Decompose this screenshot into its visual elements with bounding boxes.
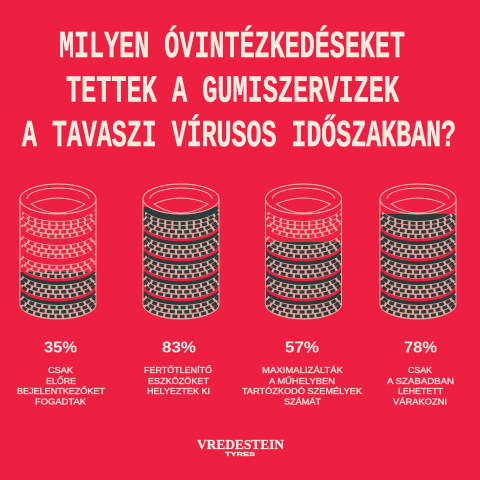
statistic: 83%: ESZKÖZÖKET [148, 377, 209, 386]
statistic: 57%: 57% [285, 340, 319, 356]
statistic: 78% [387, 340, 454, 406]
chart: tyre stack 35% [20, 184, 96, 319]
statistic: 35%: CSAK [48, 366, 74, 375]
statistic: 83%: HELYEZTEK KI [147, 387, 210, 396]
statistic: 57%: TARTÓZKODÓ SZEMÉLYEK [242, 387, 363, 396]
statistic: 35%: ELŐRE [46, 377, 76, 386]
chart: tyre stack 57% [266, 184, 342, 319]
chart: tyre stack 78% [380, 184, 456, 319]
statistic: 78%: 78% [404, 340, 437, 356]
statistic: 78%: CSAK [408, 366, 433, 375]
statistic: 83%: FERTŐTLENÍTŐ [144, 366, 212, 375]
statistic: 78%: VÁRAKOZNI [393, 398, 447, 406]
statistic: 83%: 83% [162, 340, 196, 356]
statistic: 35%: BEJELENTKEZŐKET [17, 387, 105, 396]
logo: Vredestein Tyres: TYRES [225, 452, 256, 458]
chart: tyre stack 83% [143, 184, 219, 319]
statistic: 57%: SZÁMÁT [284, 398, 321, 406]
statistic: 35%: 35% [44, 340, 77, 356]
statistic: 57% [242, 340, 363, 406]
statistic: 57%: A MŰHELYBEN [269, 377, 335, 386]
statistic: 78%: LEHETETT [398, 387, 443, 396]
logo: Vredestein Tyres: VREDESTEIN [197, 437, 284, 452]
statistic: 35% [17, 340, 105, 406]
statistic: 83% [144, 340, 212, 396]
statistic: 78%: A SZABADBAN [387, 377, 454, 386]
statistic: 35%: FOGADTAK [35, 398, 87, 406]
title [22, 24, 456, 158]
statistic: 57%: MAXIMALIZÁLTÁK [262, 366, 344, 375]
